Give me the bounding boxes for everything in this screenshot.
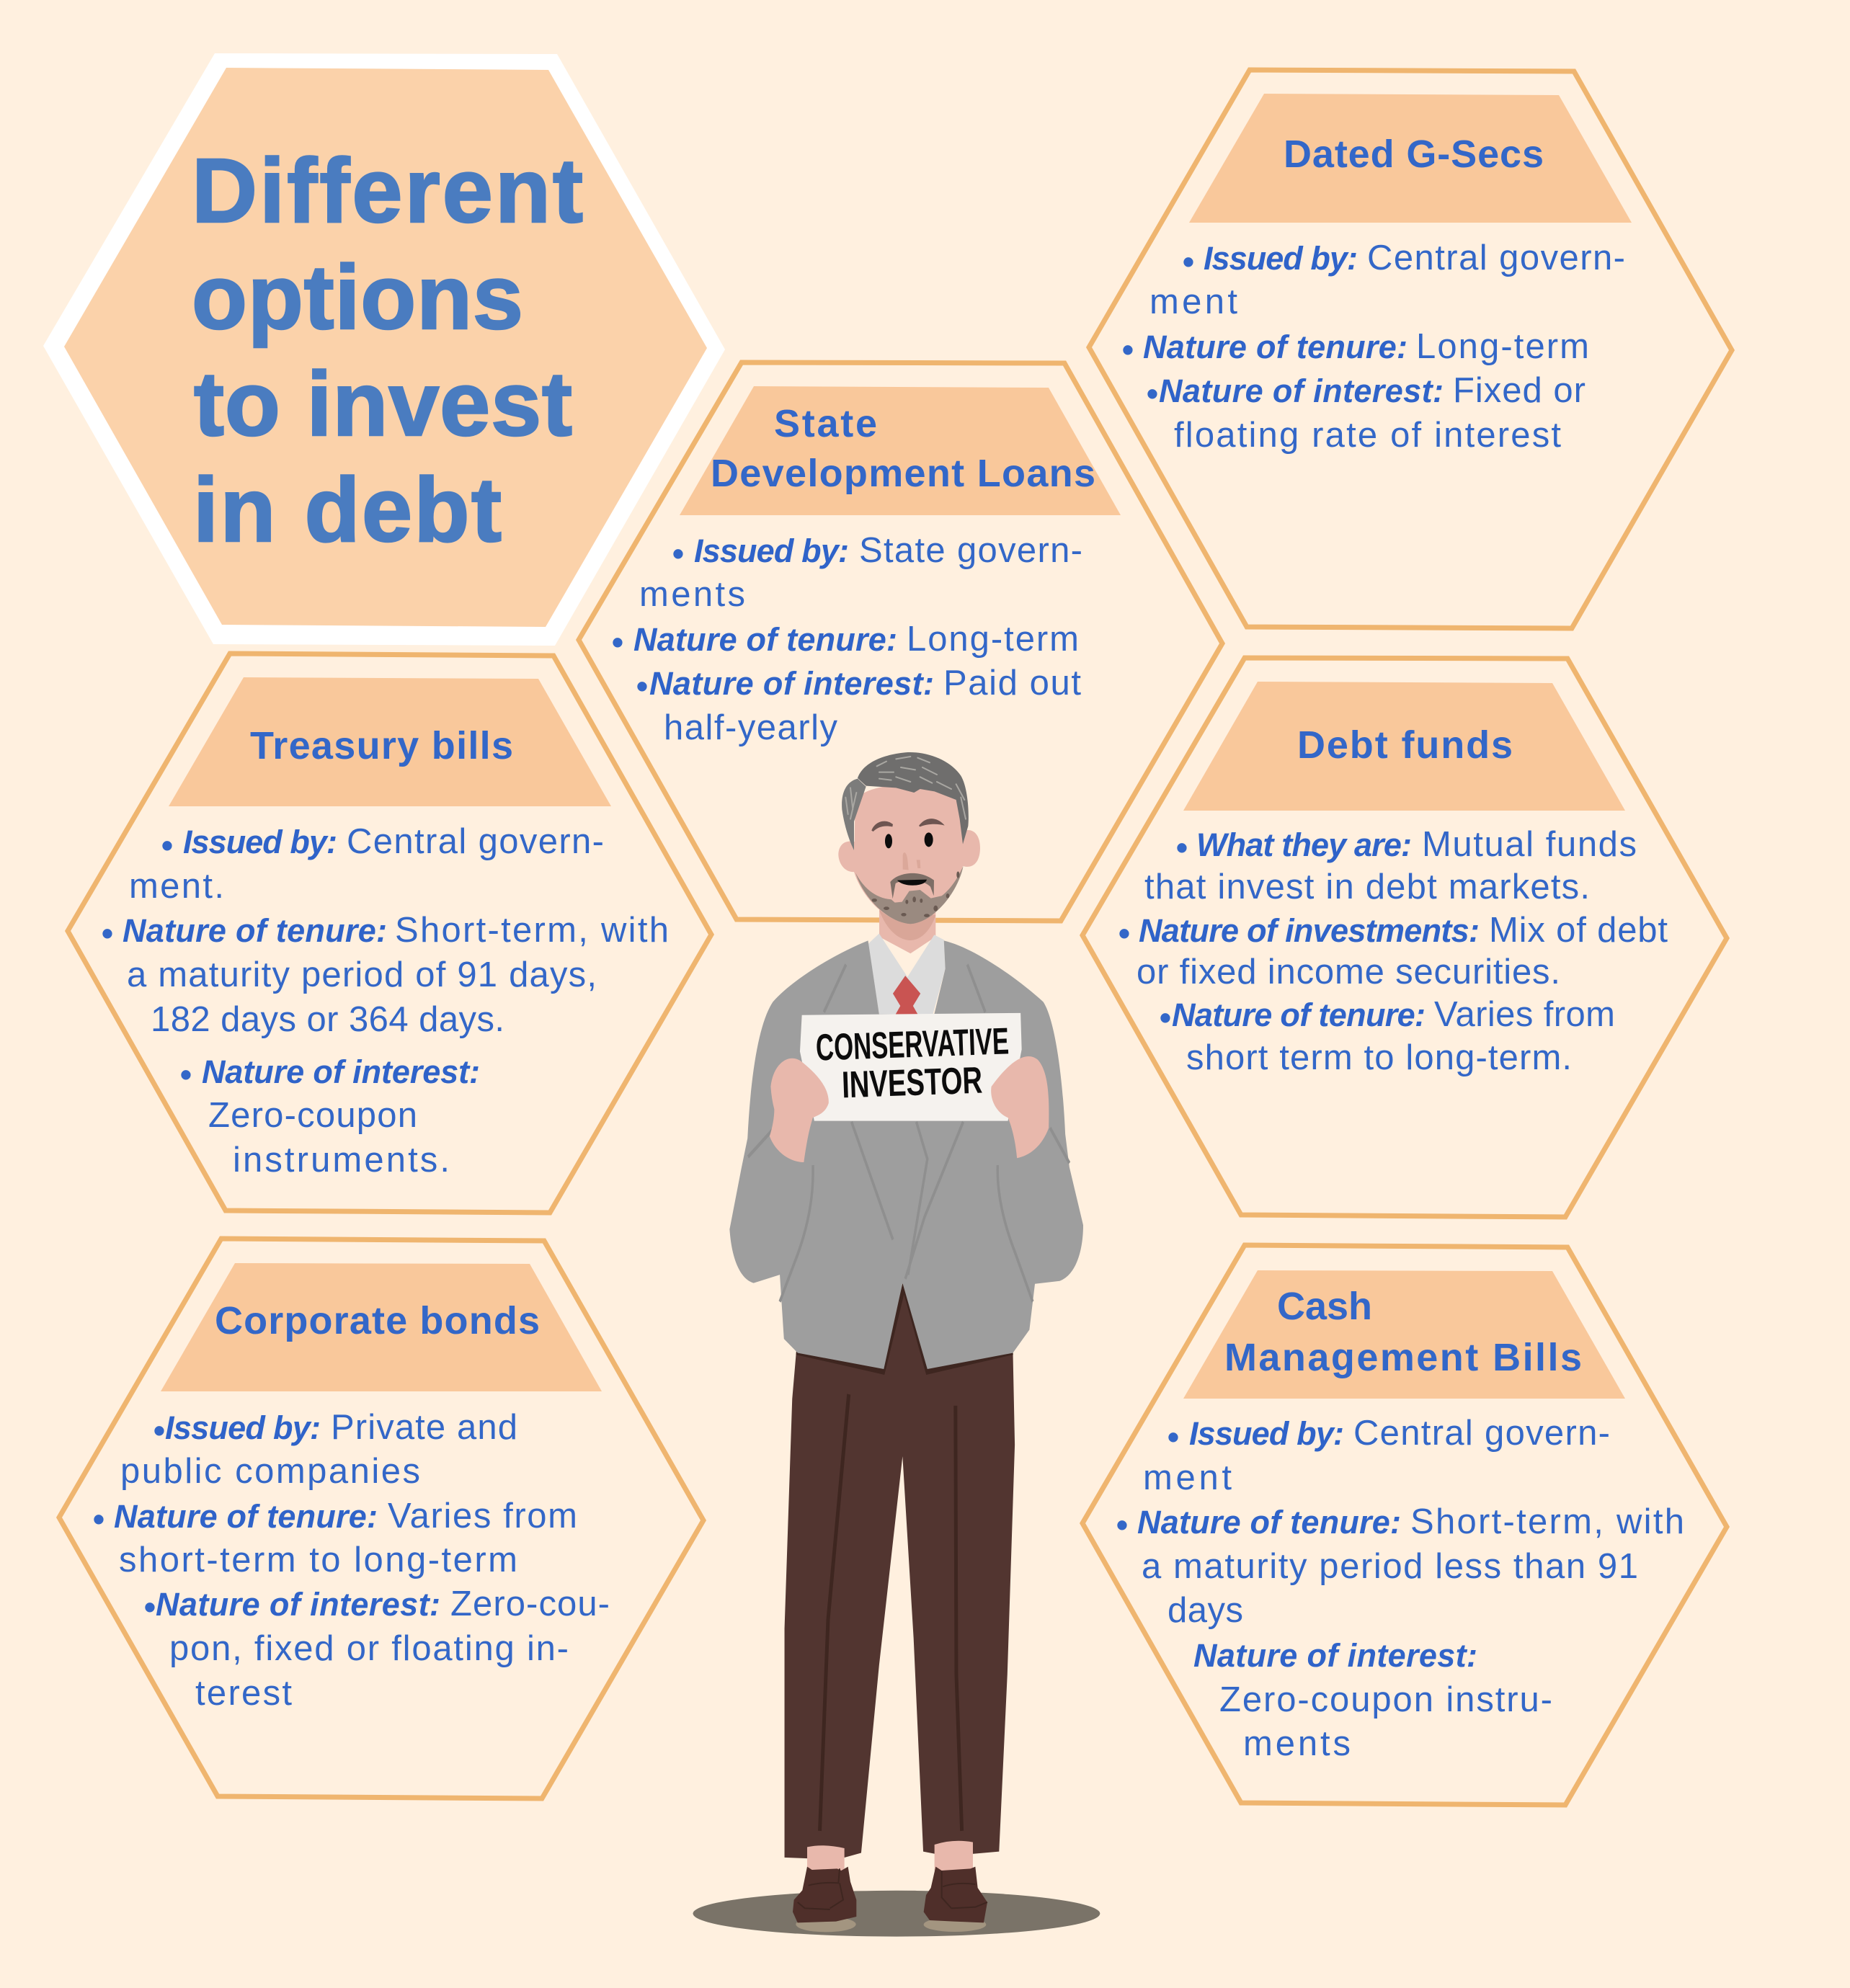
text block: Debt funds details: • <box>1118 914 1131 953</box>
text block: State Development Loans details: • <box>636 667 649 706</box>
text block: Treasury bills details: Zero-coupon <box>208 1096 417 1135</box>
text block: Dated G-Secs details: • <box>1146 375 1159 414</box>
jacket and shirt <box>729 934 1083 1369</box>
text block: Debt funds details: short term to long-term. <box>1186 1038 1572 1077</box>
text block: Dated G-Secs details: • <box>1182 243 1195 282</box>
hands <box>770 1056 1049 1162</box>
text block: Debt funds details: Nature of tenure: <box>1172 997 1426 1033</box>
panel: Cash Management Bills <box>1082 1245 1727 1805</box>
text block: Dated G-Secs details: Central govern- <box>1367 239 1625 277</box>
face <box>854 785 966 924</box>
heading: Cash Management Bills: Management Bills <box>1224 1336 1582 1379</box>
text block: Corporate bonds details: public companies <box>120 1452 420 1491</box>
text block: Dated G-Secs details: • <box>1121 331 1134 370</box>
text block: Dated G-Secs details: floating rate of interest <box>1174 416 1561 455</box>
text block: Treasury bills details <box>101 822 669 1180</box>
text block: State Development Loans details: Issued by: <box>694 532 849 569</box>
panel: Debt funds <box>1082 658 1727 1217</box>
text block: Cash Management Bills details: Issued by: <box>1189 1415 1344 1452</box>
heading: Cash Management Bills <box>1224 1285 1582 1379</box>
text block: State Development Loans details: • <box>672 535 685 574</box>
title: Different <box>192 140 583 241</box>
sign lettering: CONSERVATIVE <box>815 1020 1010 1069</box>
text block: Dated G-Secs details: Fixed or <box>1453 371 1586 410</box>
text block: Debt funds details: Nature of investments: <box>1139 912 1480 949</box>
text block: Corporate bonds details: • <box>143 1588 156 1627</box>
hair <box>858 752 969 844</box>
text block: Treasury bills details: • <box>179 1056 192 1095</box>
neck <box>879 908 935 953</box>
text block: State Development Loans details: State govern- <box>859 531 1082 570</box>
text block: Corporate bonds details <box>92 1408 610 1713</box>
heading: Debt funds: Debt funds <box>1297 723 1513 767</box>
text block: Cash Management Bills details <box>1116 1414 1684 1763</box>
text block: State Development Loans details: Long-term <box>907 620 1079 659</box>
text block: State Development Loans details: Paid out <box>943 664 1081 703</box>
text block: Corporate bonds details: • <box>153 1412 166 1450</box>
text block: Dated G-Secs details: Issued by: <box>1204 240 1358 277</box>
text block: Corporate bonds details: Zero-cou- <box>450 1584 610 1623</box>
text block: Corporate bonds details: Varies from <box>388 1497 577 1535</box>
text block: Treasury bills details: Nature of tenure: <box>123 912 387 949</box>
text block: Cash Management Bills details: Short-term, with <box>1410 1502 1684 1541</box>
text block: Cash Management Bills details: Central govern- <box>1353 1414 1610 1453</box>
hair highlights <box>845 757 966 819</box>
title: in debt <box>193 459 502 561</box>
text block: State Development Loans details: Nature of interest: <box>649 665 934 702</box>
hair side <box>842 779 866 850</box>
ears <box>838 830 980 872</box>
text block: Corporate bonds details: Private and <box>331 1408 517 1447</box>
beard <box>855 866 964 924</box>
text block: Treasury bills details: instruments. <box>233 1141 450 1180</box>
text block: Dated G-Secs details <box>1121 239 1625 455</box>
text block: Corporate bonds details: Nature of tenure: <box>114 1498 378 1535</box>
text block: Debt funds details: Varies from <box>1434 995 1615 1034</box>
eyebrows <box>871 819 945 832</box>
panel: State Development Loans <box>579 362 1222 921</box>
panel: Treasury bills <box>68 654 711 1213</box>
text block: State Development Loans details <box>611 531 1082 747</box>
heading: Corporate bonds: Corporate bonds <box>215 1299 540 1342</box>
text block: Cash Management Bills details: Nature of interest: <box>1193 1637 1477 1674</box>
text block: Treasury bills details: Issued by: <box>183 824 337 860</box>
text block: State Development Loans details: half-yearly <box>664 708 837 747</box>
text block: Treasury bills details: • <box>101 914 114 953</box>
text block: Treasury bills details: 182 days or 364 days. <box>151 1000 504 1039</box>
title: options <box>192 246 523 348</box>
text block: Debt funds details: Mutual funds <box>1422 825 1637 864</box>
text block: Cash Management Bills details: a maturity period less than 91 <box>1142 1547 1638 1586</box>
eyes <box>885 832 933 848</box>
text block: Debt funds details: What they are: <box>1196 826 1412 863</box>
heading: Treasury bills: Treasury bills <box>250 724 513 767</box>
sign lettering: INVESTOR <box>841 1060 983 1106</box>
text block: Treasury bills details: • <box>161 826 174 865</box>
nose <box>903 852 920 870</box>
text block: Debt funds details: Mix of debt <box>1489 911 1668 950</box>
text block: Debt funds details <box>1118 825 1668 1077</box>
title <box>192 140 583 561</box>
text block: Debt funds details: • <box>1175 829 1188 868</box>
sign lettering <box>815 1020 1010 1106</box>
moustache <box>890 873 934 899</box>
text block: Cash Management Bills details: days <box>1168 1591 1243 1630</box>
text block: Cash Management Bills details: Nature of tenure: <box>1137 1504 1401 1541</box>
text block: State Development Loans details: • <box>611 623 624 662</box>
text block: Debt funds details: that invest in debt markets. <box>1144 868 1590 906</box>
title: to invest <box>194 353 572 455</box>
text block: Cash Management Bills details: • <box>1116 1506 1129 1545</box>
heading: State Development Loans: Development Loans <box>711 452 1095 495</box>
heading: Cash Management Bills: Cash <box>1277 1285 1372 1328</box>
text block: Treasury bills details: a maturity period of 91 days, <box>127 955 597 994</box>
panel: title hexagon <box>43 53 725 646</box>
sign <box>800 1013 1022 1121</box>
text block: Corporate bonds details: Nature of interest: <box>156 1586 440 1623</box>
ground shadow and trousers <box>693 1282 1100 1937</box>
text block: Treasury bills details: ment. <box>129 867 224 906</box>
shoes and socks <box>793 1841 987 1932</box>
illustration: conservative investor <box>693 752 1100 1937</box>
text block: Cash Management Bills details: Zero-coupon instru- <box>1219 1680 1552 1719</box>
panel: Corporate bonds <box>59 1239 703 1798</box>
beard texture <box>872 871 959 917</box>
heading: State Development Loans: State <box>774 402 877 445</box>
heading: State Development Loans <box>711 402 1095 495</box>
text block: Corporate bonds details: pon, fixed or floating in- <box>169 1629 569 1668</box>
text block: State Development Loans details: ments <box>639 575 745 614</box>
text block: Cash Management Bills details: ment <box>1143 1458 1232 1497</box>
text block: Dated G-Secs details: ment <box>1149 282 1237 321</box>
text block: Corporate bonds details: short-term to long-term <box>119 1541 517 1579</box>
text block: Corporate bonds details: • <box>92 1500 105 1539</box>
mouth <box>897 880 927 886</box>
text block: Treasury bills details: Nature of interest: <box>202 1053 480 1090</box>
text block: Debt funds details: • <box>1159 999 1172 1038</box>
panel: Dated G-Secs <box>1089 70 1732 628</box>
text block: Dated G-Secs details: Long-term <box>1416 327 1589 366</box>
text block: Treasury bills details: Central govern- <box>347 822 604 861</box>
text block: Dated G-Secs details: Nature of interest: <box>1159 373 1444 409</box>
text block: Treasury bills details: Short-term, with <box>395 911 669 950</box>
text block: Corporate bonds details: Issued by: <box>165 1409 321 1446</box>
text block: Cash Management Bills details: • <box>1167 1418 1180 1457</box>
text block: Cash Management Bills details: ments <box>1243 1724 1351 1763</box>
text block: Dated G-Secs details: Nature of tenure: <box>1143 329 1407 365</box>
heading: Dated G-Secs: Dated G-Secs <box>1284 133 1544 176</box>
text block: Debt funds details: or fixed income securities. <box>1137 953 1560 991</box>
text block: Corporate bonds details: terest <box>195 1674 292 1713</box>
head <box>838 752 980 924</box>
text block: State Development Loans details: Nature of tenure: <box>633 621 897 658</box>
